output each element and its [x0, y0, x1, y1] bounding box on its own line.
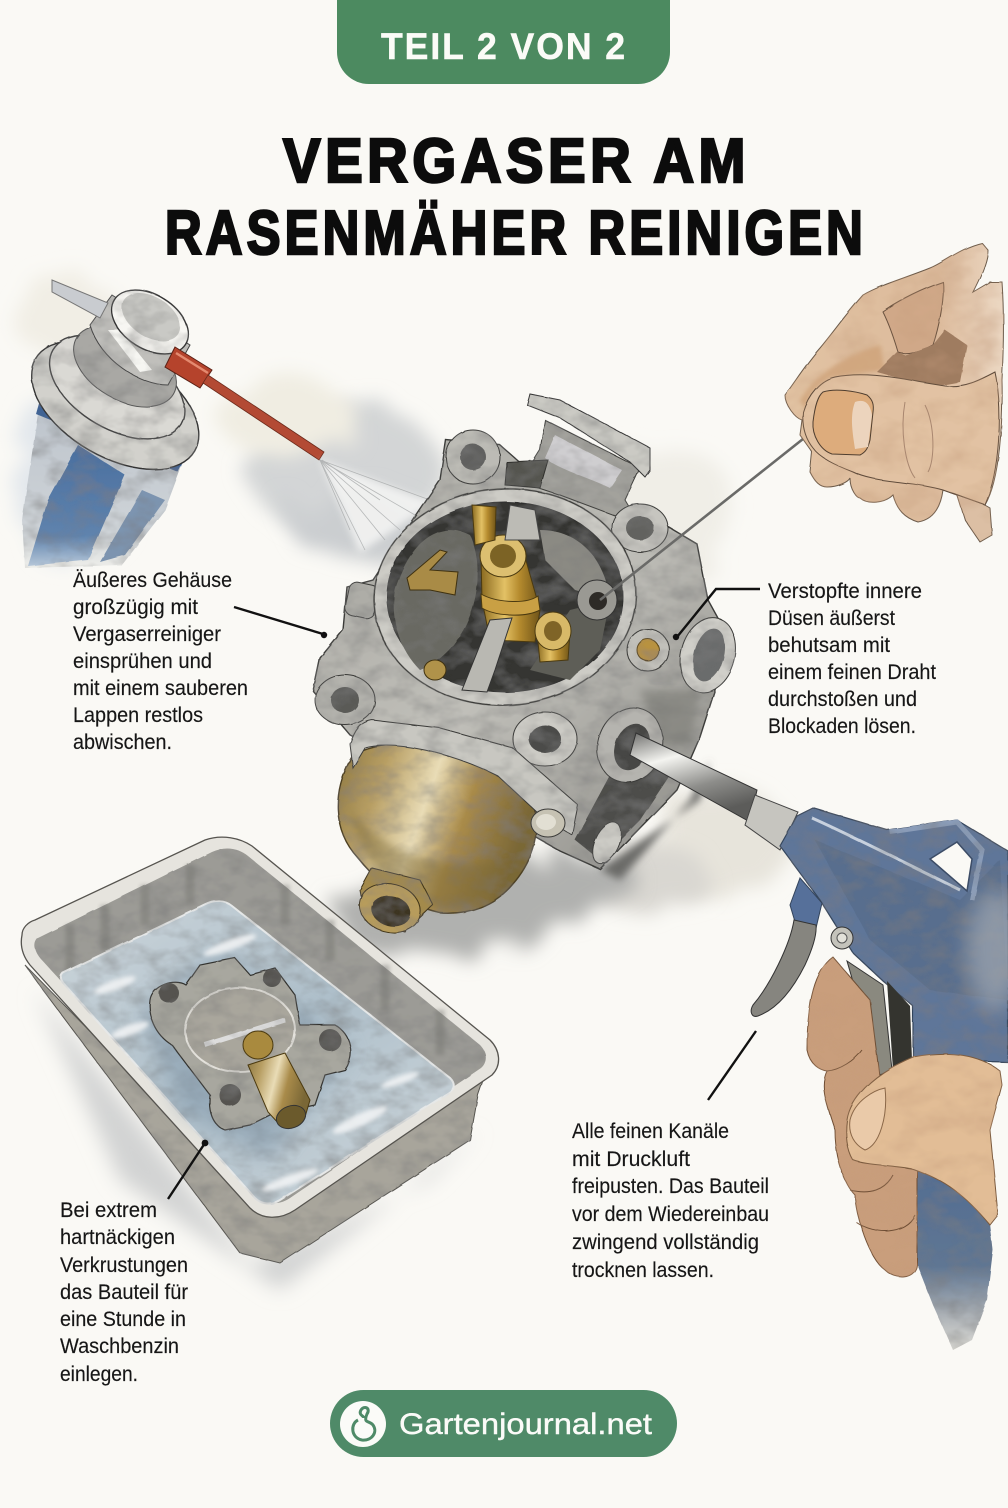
carburetor cavity	[387, 502, 623, 692]
callout text: outer housing: mit einem sauberen	[73, 677, 248, 700]
callout text: compressed air: mit Druckluft	[572, 1148, 690, 1171]
top banner: TEIL 2 VON 2	[381, 26, 627, 67]
body shading	[575, 760, 680, 860]
air gun pin and lever	[831, 927, 912, 1078]
finger inside	[883, 282, 943, 353]
callout text: inner jets: durchstoßen und	[768, 688, 917, 711]
illustration: carburetor	[313, 394, 744, 939]
silver arm	[462, 618, 512, 692]
callout text: soak in benzine: das Bauteil für	[60, 1281, 188, 1304]
callout text: outer housing: Vergaserreiniger	[73, 623, 221, 646]
carburetor neck and flange	[505, 394, 650, 525]
callout text: soak in benzine: Verkrustungen	[60, 1254, 188, 1277]
can body	[22, 400, 183, 568]
tray wall streaks	[70, 865, 440, 1055]
lower hand thumb	[846, 1054, 1002, 1225]
thumbnail	[813, 390, 873, 455]
callout text: inner jets	[768, 580, 936, 738]
water ripples	[93, 931, 420, 1195]
can cap	[90, 277, 200, 385]
air gun trigger stem	[790, 878, 822, 928]
callout text: compressed air: trocknen lassen.	[572, 1259, 714, 1282]
tray rim	[21, 837, 499, 1217]
bowl lower shading	[350, 810, 510, 909]
small brass jet	[537, 632, 570, 662]
title: VERGASER AM	[283, 127, 750, 196]
callout text: outer housing	[73, 569, 248, 754]
knuckle shading	[800, 345, 885, 410]
footer badge	[330, 1390, 677, 1457]
callout text: outer housing: Lappen restlos	[73, 704, 203, 727]
bowl drain nozzle	[354, 868, 433, 939]
callout text: soak in benzine	[60, 1199, 188, 1386]
bowl bolt	[531, 809, 565, 837]
illustration: spray can	[9, 277, 324, 568]
callout text: inner jets: Düsen äußerst	[768, 607, 895, 630]
callout text: soak in benzine: Waschbenzin	[60, 1335, 179, 1358]
callout text: compressed air: Alle feinen Kanäle	[572, 1120, 729, 1143]
finger gap	[877, 330, 967, 385]
callout text: outer housing: Äußeres Gehäuse	[73, 569, 232, 592]
callout text: compressed air: freipusten. Das Bauteil	[572, 1175, 769, 1198]
callout text: outer housing: einsprühen und	[73, 650, 212, 673]
air gun lower handle	[905, 1140, 993, 1350]
carburetor shadow	[600, 760, 710, 880]
spray mist	[320, 460, 433, 553]
water shadow around part	[140, 950, 350, 1160]
illustration: air gun body	[780, 808, 1008, 1062]
thumb crease	[903, 402, 933, 478]
tray inner wall	[35, 849, 486, 1203]
bowl flange	[350, 720, 578, 835]
pipe	[52, 280, 108, 318]
illustration: air gun nozzle	[630, 733, 798, 850]
carburetor body	[313, 440, 730, 869]
silver cap	[505, 505, 540, 540]
callout text: inner jets: einem feinen Draht	[768, 661, 936, 684]
callout text: soak in benzine: hartnäckigen	[60, 1226, 175, 1249]
callout text: inner jets: Blockaden lösen.	[768, 715, 916, 738]
hand shape	[785, 243, 1004, 522]
right side shading	[640, 690, 700, 745]
brass link	[407, 550, 458, 595]
callout text: soak in benzine: eine Stunde in	[60, 1308, 186, 1331]
small lower brass	[424, 660, 446, 680]
lower hand fingers	[807, 957, 917, 1277]
logo icon	[340, 1401, 386, 1447]
callout text: outer housing: abwischen.	[73, 731, 172, 754]
cleaning wire	[600, 362, 900, 600]
title	[165, 127, 867, 268]
callout text: compressed air	[572, 1120, 769, 1282]
brass float bowl	[338, 745, 537, 913]
nozzle hole	[577, 580, 617, 620]
callout text: compressed air: vor dem Wiedereinbau	[572, 1203, 769, 1226]
watercolor background stains	[15, 280, 787, 1290]
air gun trigger	[751, 920, 816, 1016]
callout text: outer housing: großzügig mit	[73, 596, 198, 619]
illustration: metal tray	[21, 837, 499, 1263]
part in tray	[150, 958, 351, 1130]
callout text: soak in benzine: Bei extrem	[60, 1199, 157, 1222]
red nozzle	[165, 347, 324, 460]
tray outer wall	[25, 965, 490, 1263]
top banner	[337, 0, 670, 84]
callout leader lines	[168, 589, 760, 1199]
hand wrist wedge	[955, 488, 992, 542]
nail lunula	[852, 401, 872, 449]
brass fitting	[243, 1031, 310, 1132]
callout text: inner jets: Verstopfte innere	[768, 580, 922, 603]
callout text: inner jets: behutsam mit	[768, 634, 890, 657]
thumb	[803, 372, 999, 505]
can shoulder	[9, 309, 221, 496]
tray water	[61, 901, 454, 1204]
air gun hand grip opening	[930, 842, 972, 891]
air gun grey fade	[967, 890, 1008, 1010]
illustration: hand with wire	[785, 243, 1004, 542]
center brass jet	[481, 557, 540, 642]
mounting lugs	[315, 430, 744, 868]
title: RASENMÄHER REINIGEN	[165, 199, 867, 268]
callout text: soak in benzine: einlegen.	[60, 1363, 138, 1386]
callout text: compressed air: zwingend vollständig	[572, 1231, 759, 1254]
ring	[367, 480, 643, 714]
footer badge: Gartenjournal.net	[399, 1408, 653, 1441]
upper brass screw	[472, 505, 496, 545]
